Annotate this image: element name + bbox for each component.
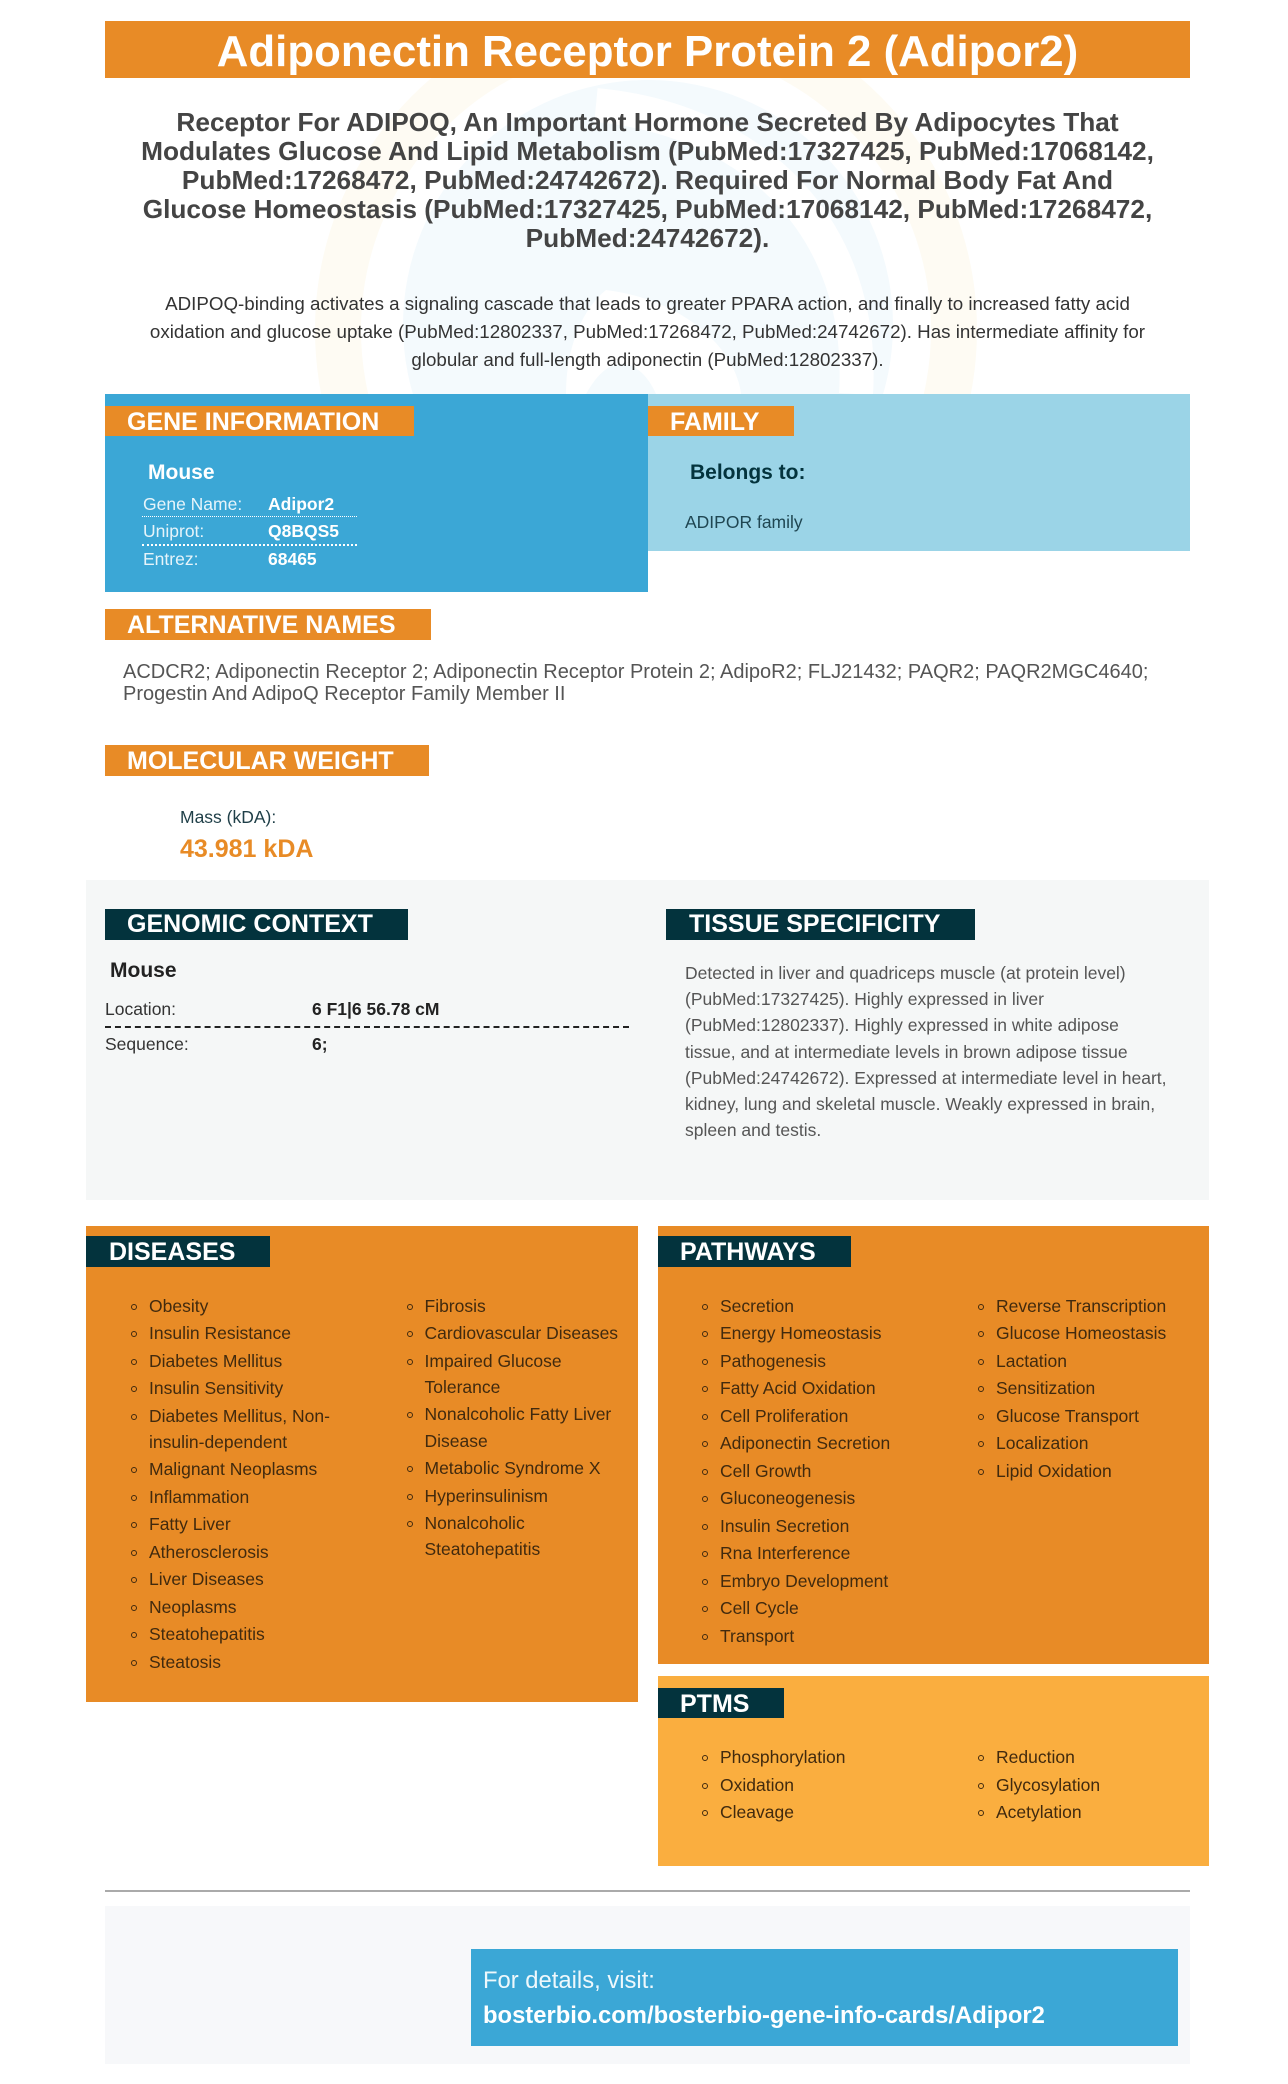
diseases list column 1: insulin-dependent bbox=[149, 1432, 287, 1452]
subtitle: PubMed:17268472, PubMed:24742672). Required For Normal Body Fat And bbox=[182, 165, 1113, 195]
heading: alternative names: ALTERNATIVE NAMES bbox=[127, 611, 396, 639]
diseases list column 1: Liver Diseases bbox=[149, 1569, 264, 1589]
heading: diseases: DISEASES bbox=[109, 1238, 235, 1266]
ptms list column 2: Glycosylation bbox=[996, 1775, 1100, 1795]
belongs to label: Belongs to: bbox=[690, 461, 806, 484]
pathways list column 2: Lipid Oxidation bbox=[996, 1461, 1112, 1481]
callout: details link bbox=[471, 1949, 1178, 2046]
genomic species label: Mouse bbox=[110, 959, 177, 982]
family value: ADIPOR family bbox=[685, 512, 803, 532]
pathways list column 1: Cell Proliferation bbox=[720, 1406, 848, 1426]
entrez value: 68465 bbox=[268, 549, 317, 569]
diseases list column 2: Fibrosis bbox=[424, 1296, 486, 1316]
ptms list column 1: Phosphorylation bbox=[720, 1747, 846, 1767]
panel: gene information bbox=[105, 394, 648, 592]
diseases list column 1: Fatty Liver bbox=[149, 1514, 231, 1534]
panel: ptms bbox=[658, 1676, 1209, 1866]
diseases list column 1: Diabetes Mellitus, Non- bbox=[149, 1406, 330, 1426]
heading: pathways: PATHWAYS bbox=[680, 1238, 816, 1266]
uniprot value: Q8BQS5 bbox=[268, 521, 339, 541]
pathways list column 2: Sensitization bbox=[996, 1378, 1095, 1398]
location label: Location: bbox=[105, 999, 176, 1019]
panel: family bbox=[648, 394, 1190, 551]
description paragraph: oxidation and glucose uptake (PubMed:12802337, PubMed:17268472, PubMed:24742672). Has intermediate affinity for bbox=[150, 321, 1145, 342]
pathways list column 2: Reverse Transcription bbox=[996, 1296, 1166, 1316]
diseases list column 1: Neoplasms bbox=[149, 1597, 237, 1617]
subtitle: Receptor For ADIPOQ, An Important Hormone Secreted By Adipocytes That bbox=[176, 107, 1119, 137]
diseases list column 2: Metabolic Syndrome X bbox=[424, 1458, 601, 1478]
description paragraph bbox=[150, 293, 1145, 370]
tissue specificity text: spleen and testis. bbox=[685, 1120, 821, 1140]
tissue specificity text: kidney, lung and skeletal muscle. Weakly expressed in brain, bbox=[685, 1094, 1155, 1114]
pathways list column 1: Secretion bbox=[720, 1296, 794, 1316]
sequence label: Sequence: bbox=[105, 1034, 189, 1054]
pathways list column 1: Embryo Development bbox=[720, 1571, 888, 1591]
entrez label: Entrez: bbox=[143, 549, 198, 569]
pathways list column 2: Glucose Homeostasis bbox=[996, 1323, 1166, 1343]
pathways list column 1: Pathogenesis bbox=[720, 1351, 826, 1371]
pathways list column 1: Energy Homeostasis bbox=[720, 1323, 881, 1343]
pathways list column 2 bbox=[978, 1296, 1166, 1481]
heading: gene information: GENE INFORMATION bbox=[127, 408, 379, 436]
heading: pathways bbox=[658, 1236, 851, 1267]
diseases list column 2: Disease bbox=[424, 1431, 488, 1451]
heading: genomic context: GENOMIC CONTEXT bbox=[127, 910, 373, 938]
pathways list column 2: Glucose Transport bbox=[996, 1406, 1139, 1426]
callout url: bosterbio.com/bosterbio-gene-info-cards/Adipor2 bbox=[483, 2002, 1045, 2029]
pathways list column 1: Adiponectin Secretion bbox=[720, 1433, 890, 1453]
ptms list column 2 bbox=[978, 1747, 1100, 1822]
diseases list column 2: Impaired Glucose bbox=[424, 1351, 562, 1371]
panel: diseases bbox=[86, 1226, 638, 1702]
sequence value: 6; bbox=[312, 1034, 328, 1054]
subtitle: Glucose Homeostasis (PubMed:17327425, PubMed:17068142, PubMed:17268472, bbox=[143, 194, 1152, 224]
gene name value: Adipor2 bbox=[268, 494, 334, 514]
diseases list column 1: Inflammation bbox=[149, 1487, 249, 1507]
pathways list column 2: Lactation bbox=[996, 1351, 1067, 1371]
diseases list column 1: Atherosclerosis bbox=[149, 1542, 269, 1562]
diseases list column 2: Tolerance bbox=[424, 1377, 500, 1397]
heading: ptms: PTMS bbox=[680, 1690, 749, 1718]
species label: Mouse bbox=[148, 461, 215, 484]
pathways list column 1: Gluconeogenesis bbox=[720, 1488, 855, 1508]
description paragraph: ADIPOQ-binding activates a signaling cascade that leads to greater PPARA action, and finally to increased fatty acid bbox=[165, 293, 1130, 314]
diseases list column 1: Steatohepatitis bbox=[149, 1624, 265, 1644]
gene name row bbox=[142, 489, 357, 517]
heading: tissue specificity: TISSUE SPECIFICITY bbox=[689, 910, 940, 938]
heading: molecular weight: MOLECULAR WEIGHT bbox=[127, 747, 394, 775]
pathways list column 1: Insulin Secretion bbox=[720, 1516, 849, 1536]
entrez row bbox=[143, 549, 317, 569]
pathways list column 1: Transport bbox=[720, 1626, 794, 1646]
pathways list column 1 bbox=[702, 1296, 890, 1646]
ptms list column 1: Cleavage bbox=[720, 1802, 794, 1822]
heading: ptms bbox=[658, 1688, 784, 1718]
uniprot label: Uniprot: bbox=[143, 521, 204, 541]
heading: family bbox=[648, 406, 794, 436]
diseases list column 1: Insulin Sensitivity bbox=[149, 1378, 283, 1398]
diseases list column 1: Obesity bbox=[149, 1296, 208, 1316]
tissue specificity text: tissue, and at intermediate levels in brown adipose tissue bbox=[685, 1042, 1128, 1062]
ptms list column 2: Acetylation bbox=[996, 1802, 1082, 1822]
pathways list column 1: Rna Interference bbox=[720, 1543, 850, 1563]
ptms list column 1 bbox=[702, 1747, 846, 1822]
uniprot row bbox=[142, 516, 357, 546]
location value: 6 F1|6 56.78 cM bbox=[312, 999, 439, 1019]
pathways list column 2: Localization bbox=[996, 1433, 1088, 1453]
mass value: 43.981 kDA bbox=[180, 835, 313, 863]
diseases list column 1: Insulin Resistance bbox=[149, 1323, 291, 1343]
diseases list column 2: Steatohepatitis bbox=[424, 1539, 540, 1559]
pathways list column 1: Cell Cycle bbox=[720, 1598, 799, 1618]
alternative names text bbox=[123, 661, 1148, 705]
watermark logo bbox=[315, 78, 977, 394]
tissue specificity text: (PubMed:24742672). Expressed at intermediate level in heart, bbox=[685, 1068, 1167, 1088]
tissue specificity text bbox=[685, 963, 1167, 1140]
sequence row bbox=[105, 1034, 328, 1054]
tissue specificity text: (PubMed:17327425). Highly expressed in liver bbox=[685, 989, 1044, 1009]
tissue specificity text: (PubMed:12802337). Highly expressed in white adipose bbox=[685, 1015, 1119, 1035]
location row bbox=[105, 994, 629, 1028]
subtitle bbox=[141, 107, 1154, 253]
mass label: Mass (kDA): bbox=[180, 807, 276, 827]
diseases list column 1: Malignant Neoplasms bbox=[149, 1459, 317, 1479]
diseases list column 2: Cardiovascular Diseases bbox=[424, 1323, 618, 1343]
callout label: For details, visit: bbox=[483, 1967, 655, 1994]
panel: genomic context and tissue specificity bbox=[86, 880, 1209, 1200]
pathways list column 1: Cell Growth bbox=[720, 1461, 811, 1481]
diseases list column 1: Steatosis bbox=[149, 1652, 221, 1672]
alternative names text: Progestin And AdipoQ Receptor Family Member II bbox=[123, 683, 565, 705]
subtitle: Modulates Glucose And Lipid Metabolism (PubMed:17327425, PubMed:17068142, bbox=[141, 136, 1154, 166]
ptms list column 2: Reduction bbox=[996, 1747, 1075, 1767]
alternative names text: ACDCR2; Adiponectin Receptor 2; Adiponectin Receptor Protein 2; AdipoR2; FLJ21432; PAQR2; PAQR2MGC4640; bbox=[123, 661, 1148, 683]
subtitle: PubMed:24742672). bbox=[526, 223, 769, 253]
diseases list column 1 bbox=[131, 1296, 330, 1672]
gene name label: Gene Name: bbox=[143, 494, 242, 514]
title banner bbox=[105, 21, 1190, 78]
diseases list column 2: Nonalcoholic bbox=[424, 1513, 525, 1533]
diseases list column 1: Diabetes Mellitus bbox=[149, 1351, 282, 1371]
tissue specificity text: Detected in liver and quadriceps muscle (at protein level) bbox=[685, 963, 1126, 983]
diseases list column 2 bbox=[407, 1296, 618, 1559]
ptms list column 1: Oxidation bbox=[720, 1775, 794, 1795]
heading: diseases bbox=[86, 1236, 270, 1267]
diseases list column 2: Nonalcoholic Fatty Liver bbox=[424, 1404, 611, 1424]
heading: family: FAMILY bbox=[670, 408, 759, 436]
description paragraph: globular and full-length adiponectin (PubMed:12802337). bbox=[411, 349, 884, 370]
title banner: Adiponectin Receptor Protein 2 (Adipor2) bbox=[217, 27, 1078, 76]
diseases list column 2: Hyperinsulinism bbox=[424, 1486, 548, 1506]
panel: footer bbox=[105, 1906, 1190, 2064]
pathways list column 1: Fatty Acid Oxidation bbox=[720, 1378, 876, 1398]
panel: pathways bbox=[658, 1226, 1209, 1664]
